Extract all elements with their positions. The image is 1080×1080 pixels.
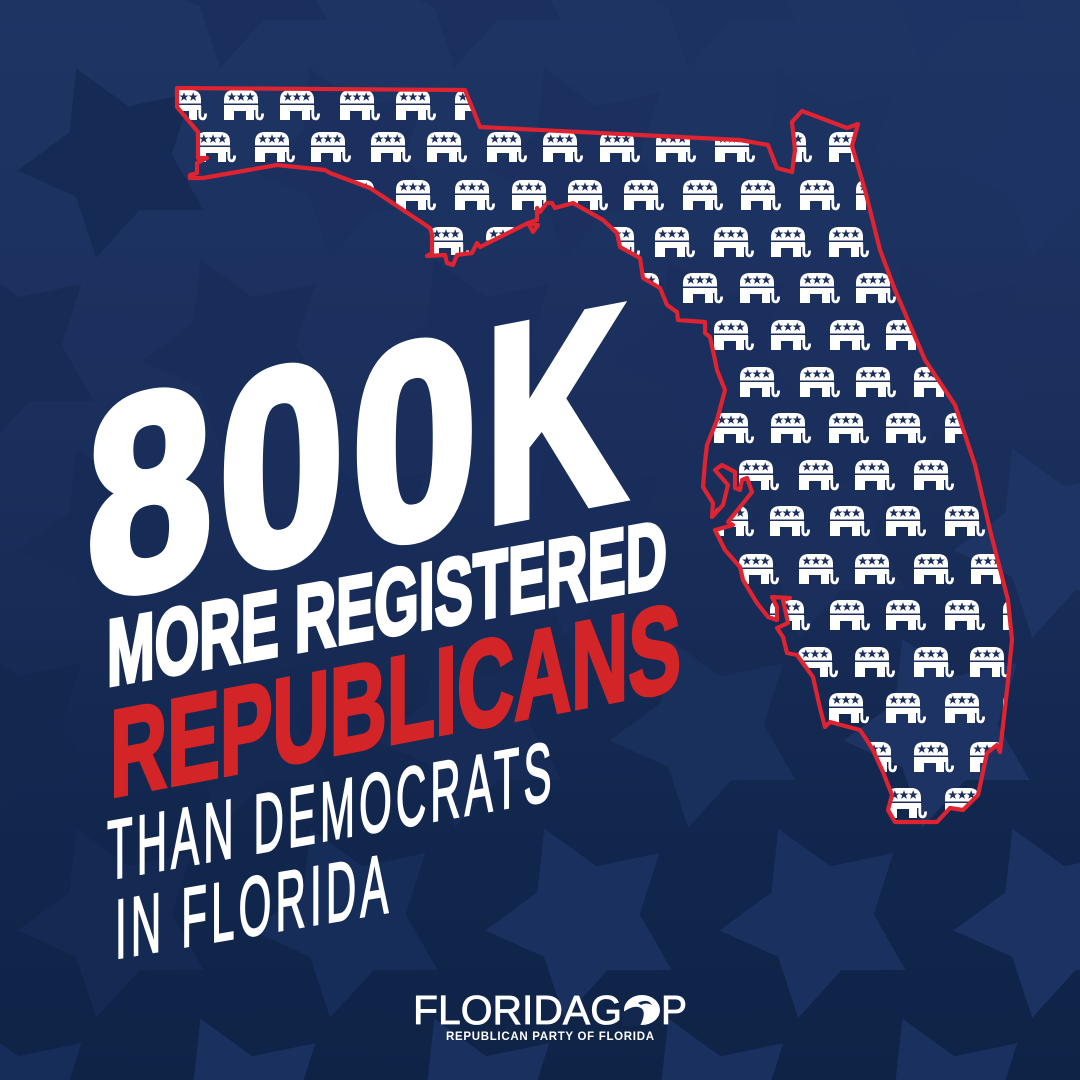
logo wordmark start: FLORIDAG [413, 987, 622, 1033]
headline: 800K [87, 248, 625, 658]
text: than democrats: THAN DEMOCRATS [107, 725, 556, 899]
elephant pattern [167, 90, 1042, 818]
logo: Florida GOP [413, 987, 687, 1043]
headline: 800K: 8 [87, 326, 212, 658]
text: more registered: MORE REGISTERED [107, 501, 667, 707]
headline: 800K: 0 [352, 276, 477, 608]
map of Florida filled with elephants [167, 88, 1042, 822]
text: republicans: REPUBLICANS [110, 578, 681, 824]
headline: 800K: 0 [219, 301, 344, 633]
logo wordmark end: P [661, 987, 687, 1033]
headline: 800K: K [485, 248, 625, 582]
logo tagline: REPUBLICAN PARTY OF FLORIDA [446, 1031, 654, 1043]
Florida outline [177, 88, 1012, 822]
text: in Florida: IN FLORIDA [115, 837, 393, 978]
logo icon: flamingo in circle [622, 995, 660, 1026]
